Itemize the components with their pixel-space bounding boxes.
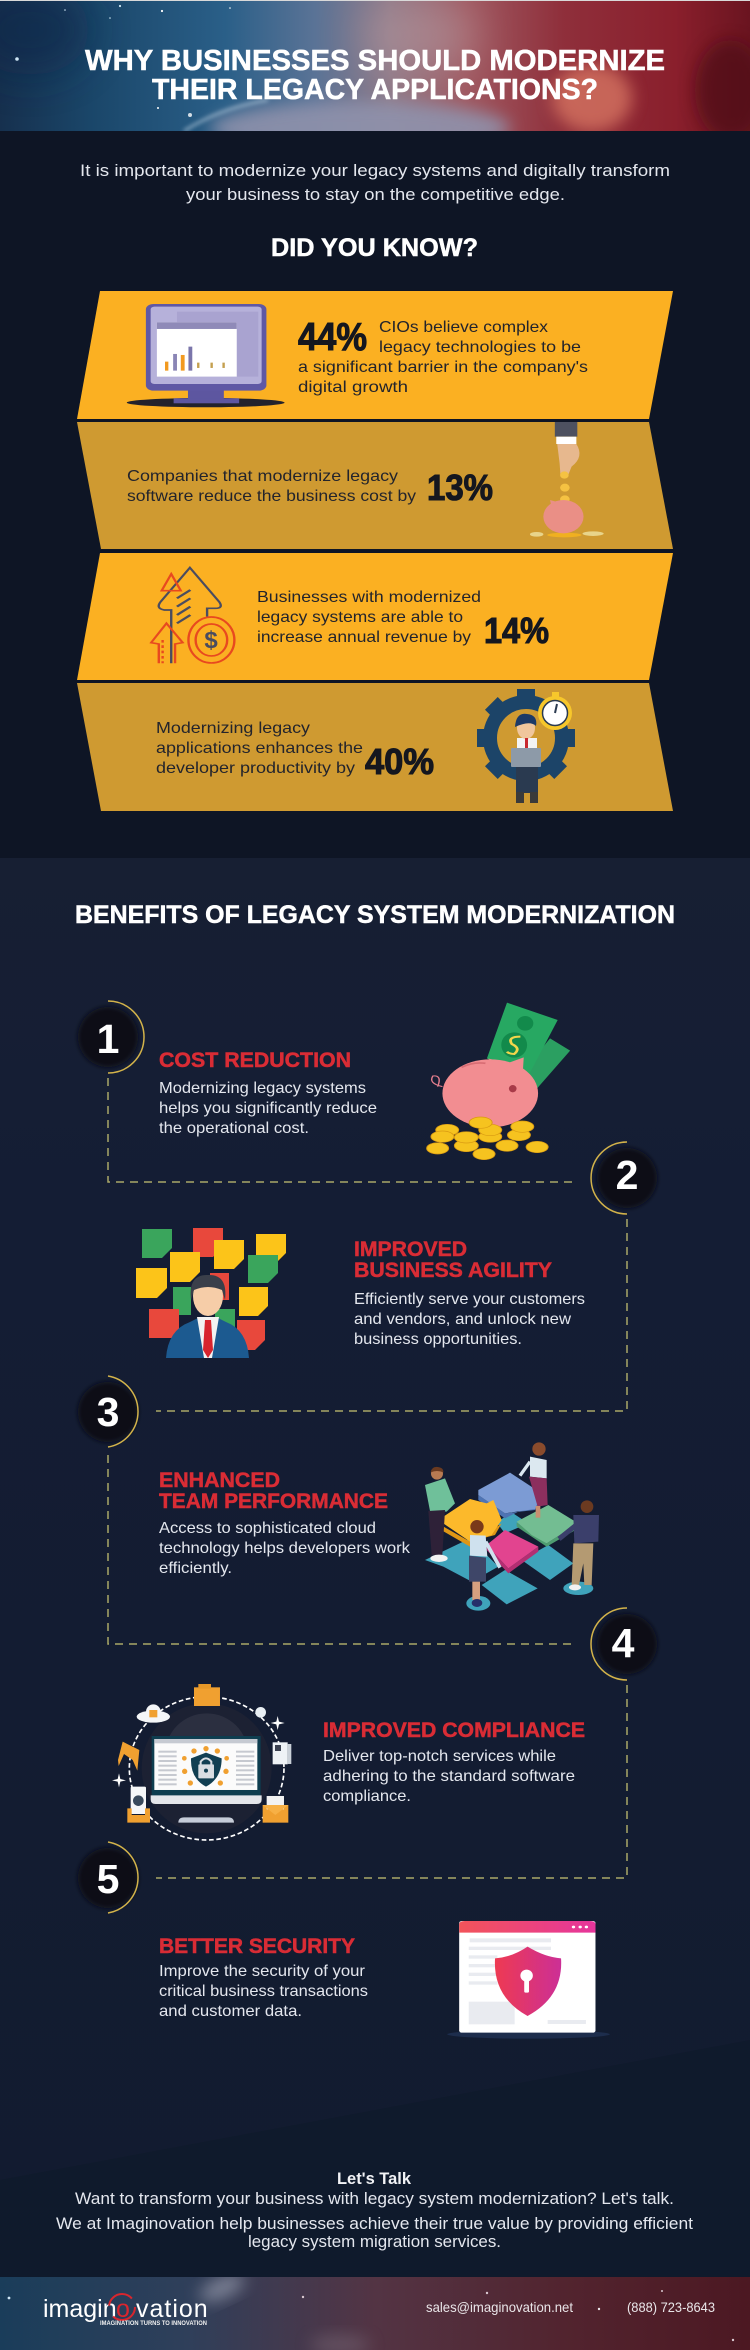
intro text [80, 162, 670, 204]
body: Improve the security of your [159, 1963, 366, 1980]
call to action: let's talk: legacy system migration services. [248, 2233, 501, 2251]
step 5 badge: 5 [97, 1856, 119, 1902]
icon: hand dropping coin into piggy bank [530, 422, 604, 537]
step 3 badge [78, 1376, 138, 1447]
panel: 13 percent [77, 422, 673, 549]
header banner [0, 0, 750, 131]
benefit 5: better security [159, 1921, 610, 2039]
stat: 44%: 44% [298, 316, 367, 359]
body: the operational cost. [159, 1120, 309, 1137]
icon: monitor with chart [127, 304, 285, 407]
body: critical business transactions [159, 1983, 368, 2000]
heading [354, 1238, 552, 1282]
stat description [257, 589, 481, 646]
body [159, 1963, 368, 2020]
body [159, 1080, 377, 1137]
title: THEIR LEGACY APPLICATIONS? [152, 74, 598, 106]
heading: benefits: BENEFITS OF LEGACY SYSTEM MODERNIZATION [75, 901, 675, 929]
title [85, 45, 665, 106]
body: technology helps developers work [159, 1540, 411, 1557]
logo: imaginovation: IMAGINATION TURNS TO INNOVATION [100, 2320, 207, 2327]
heading: IMPROVED COMPLIANCE [323, 1719, 585, 1742]
logo: imaginovation [43, 2294, 209, 2327]
dashed timeline path [108, 1078, 627, 1878]
heading [159, 1469, 388, 1513]
stat description [298, 319, 588, 396]
icon: revenue arrows and dollar coin [151, 568, 234, 663]
body: helps you significantly reduce [159, 1100, 377, 1117]
heading: IMPROVED [354, 1238, 467, 1261]
icon: dollar sign: $ [204, 627, 218, 654]
benefit 2: improved business agility [136, 1228, 585, 1358]
stat description: software reduce the business cost by [127, 488, 416, 505]
heading: TEAM PERFORMANCE [159, 1490, 388, 1513]
contact details: (888) 723-8643 [627, 2299, 715, 2315]
stat description: applications enhances the [156, 740, 363, 757]
body: business opportunities. [354, 1331, 522, 1348]
body: efficiently. [159, 1560, 232, 1577]
body [323, 1748, 575, 1805]
icon: team assembling puzzle [425, 1442, 599, 1611]
benefits section background [0, 858, 750, 2277]
stat description: a significant barrier in the company's [298, 359, 588, 376]
benefit 3: enhanced team performance [159, 1442, 599, 1611]
logo: imaginovation: vation [136, 2295, 209, 2323]
stat description: Businesses with modernized [257, 589, 481, 606]
benefit 4: improved compliance [112, 1684, 585, 1840]
call to action: let's talk [56, 2170, 693, 2251]
body: and customer data. [159, 2003, 302, 2020]
icon: piggy bank with cash and coins [427, 1003, 570, 1160]
heading: COST REDUCTION [159, 1049, 351, 1072]
step 4 badge [591, 1608, 657, 1680]
stat description: Companies that modernize legacy [127, 468, 398, 485]
panel: 44 percent [77, 291, 673, 419]
stat description: legacy systems are able to [257, 609, 463, 626]
contact details [426, 2299, 715, 2315]
logo: imaginovation: imagin [43, 2295, 117, 2323]
step 5 badge [78, 1842, 138, 1913]
step 4 badge: 4 [612, 1620, 635, 1666]
call to action: let's talk: Want to transform your business with legacy system modernization? Let's talk. [75, 2190, 674, 2208]
body: Access to sophisticated cloud [159, 1520, 376, 1537]
body [354, 1291, 585, 1348]
logo: imaginovation: o [116, 2295, 130, 2323]
icon: businessman with sticky notes [136, 1228, 286, 1358]
body: Deliver top-notch services while [323, 1748, 556, 1765]
contact details: sales@imaginovation.net [426, 2299, 573, 2315]
stat description [127, 468, 416, 505]
stat description: developer productivity by [156, 760, 355, 777]
panel: 14 percent [77, 553, 673, 680]
stat description: legacy technologies to be [379, 339, 581, 356]
icon: gear with developer and stopwatch [477, 689, 575, 803]
step 1 badge [78, 1001, 144, 1073]
stat description: digital growth [298, 379, 408, 396]
title: WHY BUSINESSES SHOULD MODERNIZE [85, 45, 665, 77]
heading: BETTER SECURITY [159, 1935, 355, 1958]
stat description [156, 720, 363, 777]
step 2 badge [591, 1142, 657, 1214]
body: Efficiently serve your customers [354, 1291, 585, 1308]
panel: 40 percent [77, 683, 673, 811]
step 3 badge: 3 [97, 1389, 119, 1435]
heading: ENHANCED [159, 1469, 280, 1492]
stat: 14%: 14% [484, 610, 549, 651]
body [159, 1520, 411, 1577]
step 2 badge: 2 [616, 1152, 638, 1198]
body: adhering to the standard software [323, 1768, 575, 1785]
stat description: increase annual revenue by [257, 629, 471, 646]
stat: 40%: 40% [365, 741, 434, 782]
stat description: CIOs believe complex [379, 319, 548, 336]
benefit 1: cost reduction [159, 1003, 570, 1160]
call to action: let's talk: Let's Talk [337, 2170, 412, 2188]
intro text: It is important to modernize your legacy systems and digitally transform [80, 162, 670, 180]
body: and vendors, and unlock new [354, 1311, 571, 1328]
icon: compliance monitor with shield [112, 1684, 291, 1840]
call to action: let's talk: We at Imaginovation help businesses achieve their true value by providing efficient [56, 2215, 693, 2233]
body: compliance. [323, 1788, 411, 1805]
heading: did you know: DID YOU KNOW? [271, 234, 478, 262]
stat: 13%: 13% [427, 467, 493, 508]
icon: browser window with shield [447, 1921, 610, 2039]
body: Modernizing legacy systems [159, 1080, 366, 1097]
stat description: Modernizing legacy [156, 720, 310, 737]
heading: BUSINESS AGILITY [354, 1259, 552, 1282]
footer banner [0, 2277, 750, 2350]
intro text: your business to stay on the competitive edge. [186, 186, 565, 204]
step 1 badge: 1 [97, 1016, 119, 1062]
